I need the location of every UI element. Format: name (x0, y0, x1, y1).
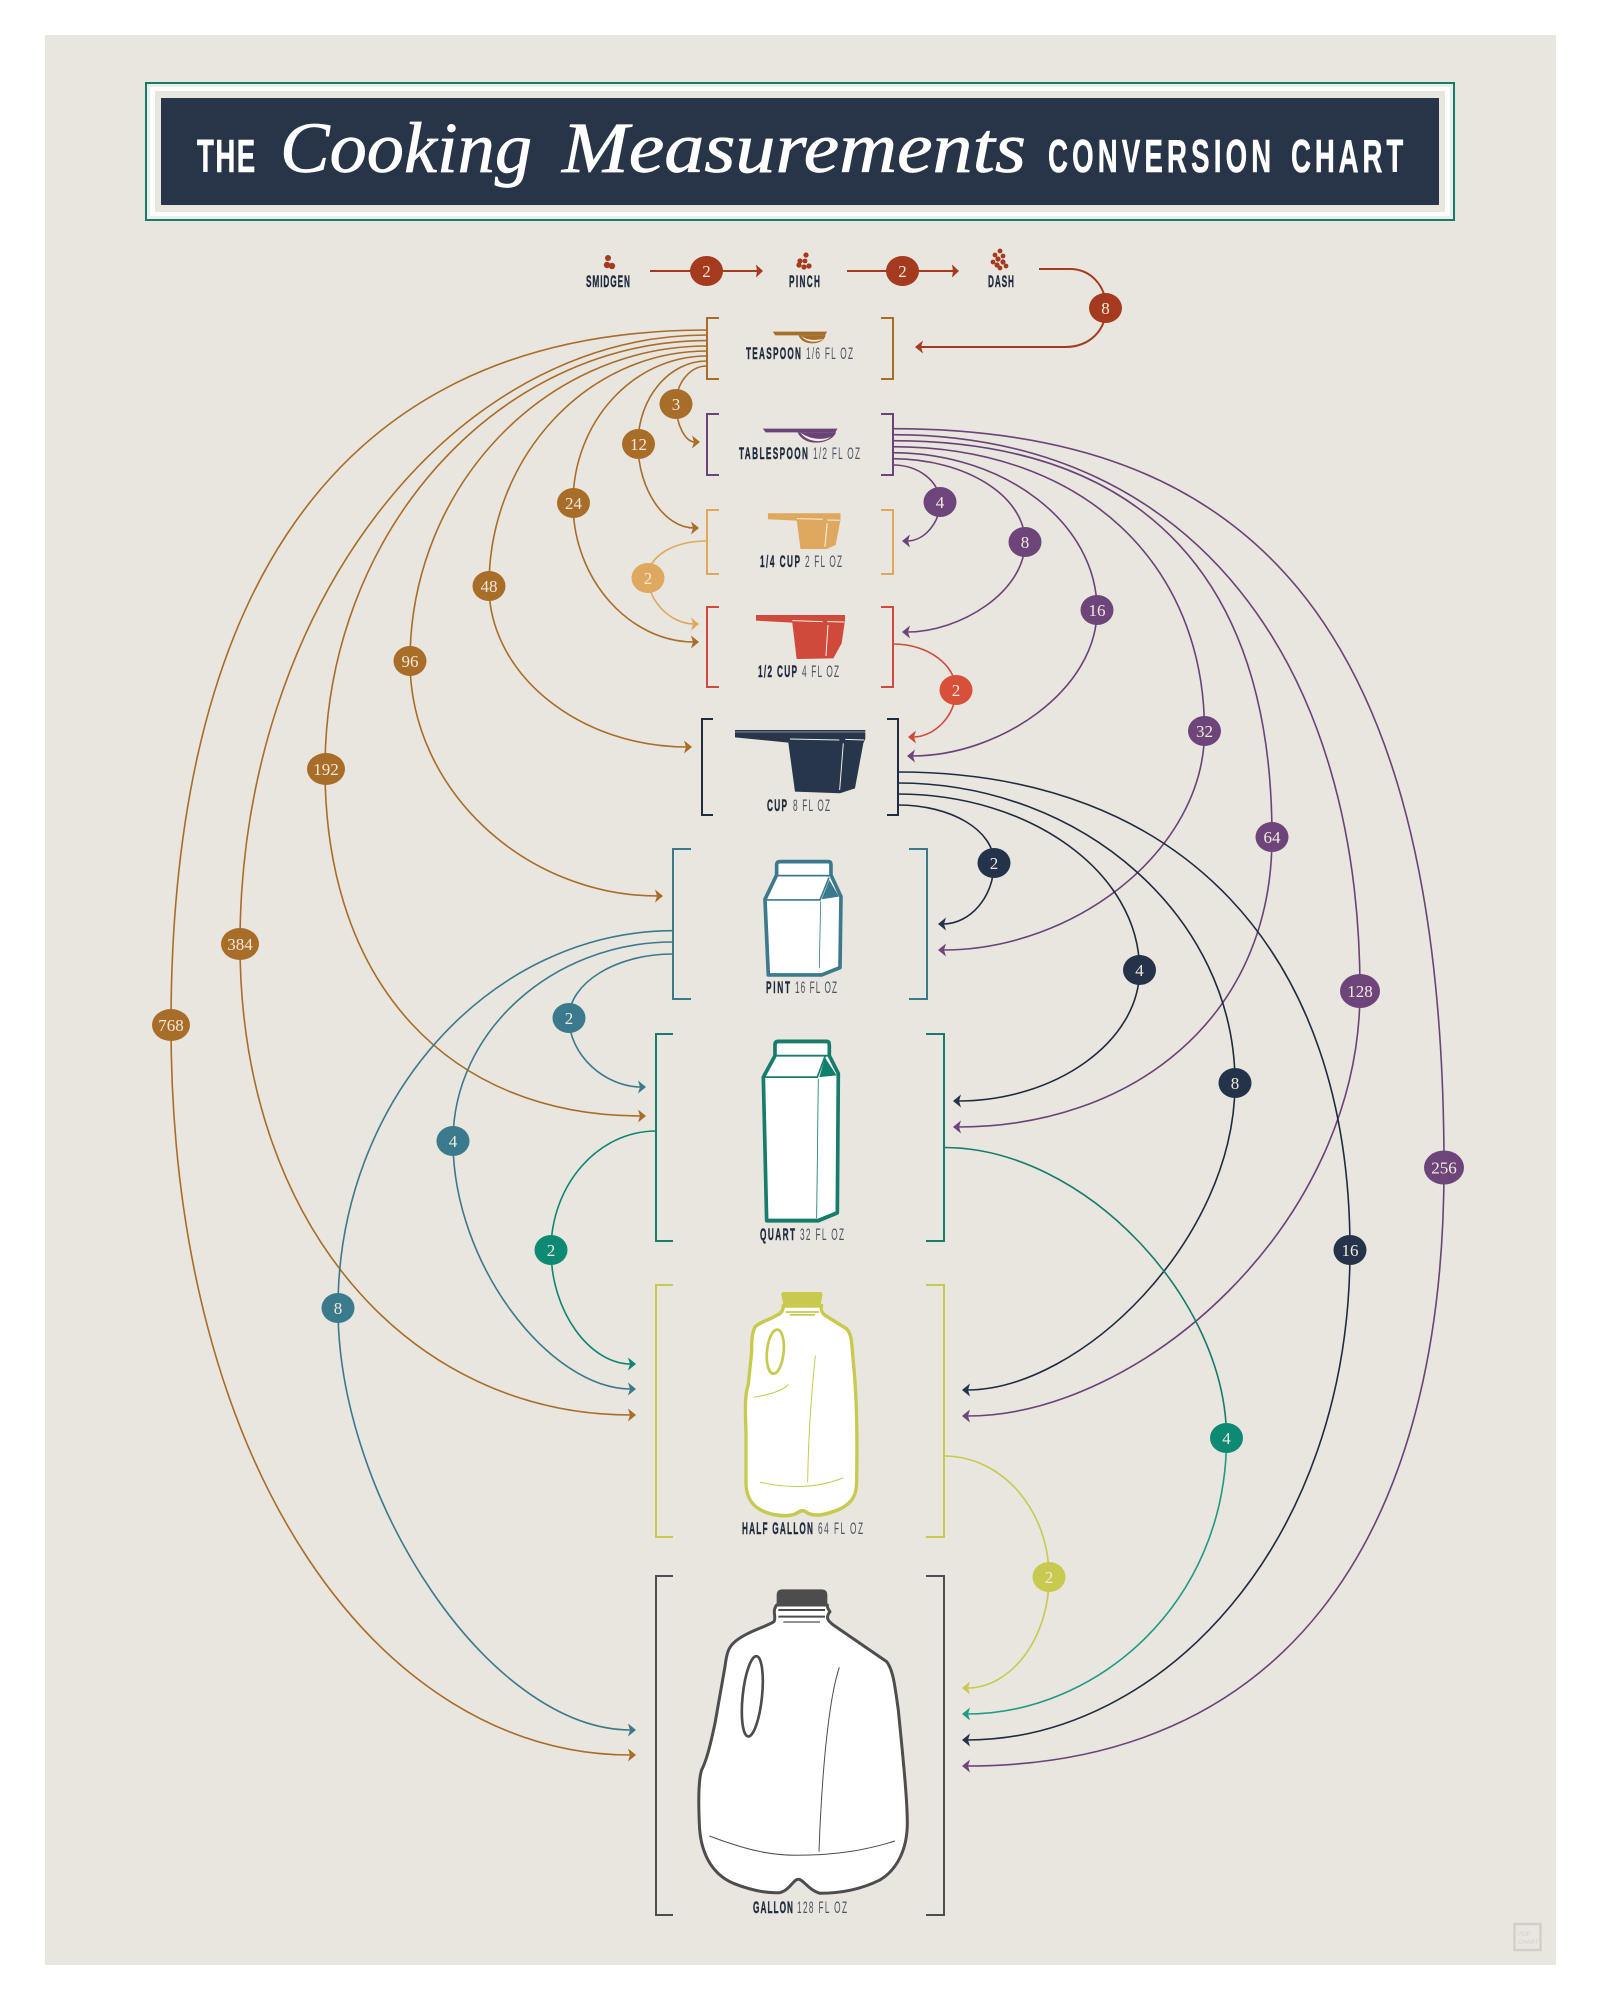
badge: 4 (436, 1126, 470, 1156)
label: half cup: 4 FL OZ (802, 662, 839, 681)
label: quarter cup (760, 552, 842, 571)
connector: 8 cups to half gallon (898, 783, 1235, 1390)
badge: 256 (1424, 1150, 1464, 1184)
badge: 8: 8 (334, 1299, 342, 1318)
connector: 8 pints to gallon (338, 931, 673, 1730)
logo: pop chart: POP (1518, 1932, 1531, 1938)
label: tablespoon: 1/2 FL OZ (813, 444, 860, 463)
badge: 8 (1008, 527, 1042, 557)
label: tablespoon: TABLESPOON (739, 444, 808, 463)
badge: 16: 16 (1342, 1241, 1358, 1260)
connector: 24 teaspoons to half cup (573, 356, 707, 642)
panel: quarter cup (707, 510, 893, 574)
badge: 96: 96 (402, 652, 418, 671)
label: pint: 16 FL OZ (795, 978, 837, 997)
badge: 768 (152, 1009, 190, 1041)
connector: 8 tablespoons to half cup (893, 459, 1025, 632)
badge: 48 (472, 571, 506, 601)
badge: 384 (221, 928, 259, 960)
icon: pinch (796, 252, 812, 270)
logo: pop chart (1514, 1924, 1540, 1950)
connector: 64 tablespoons to quart (893, 441, 1272, 1127)
icon: half cup (756, 615, 845, 659)
panel: cup (702, 719, 898, 815)
badge: 4: 4 (936, 493, 945, 512)
badge: 48: 48 (480, 577, 498, 596)
title text: cooking: Cooking (280, 108, 532, 188)
title text: the: THE (197, 132, 255, 183)
connector: 256 tablespoons to gallon (893, 429, 1444, 1766)
badge: 32 (1188, 716, 1221, 746)
badge: 64: 64 (1264, 828, 1281, 847)
badge: 3: 3 (672, 395, 680, 414)
icon: cup (735, 730, 865, 793)
label: pint (766, 978, 837, 997)
label: pinch: PINCH (789, 272, 820, 291)
connector: 2 quarts to half gallon: 2 (547, 1241, 555, 1260)
connector: 2 cups to pint (898, 805, 994, 924)
label: smidgen: SMIDGEN (586, 272, 630, 291)
badge: 128: 128 (1347, 982, 1373, 1001)
icon: smidgen (604, 255, 615, 269)
connector: 4 quarts to gallon: 4 (1222, 1429, 1231, 1448)
badge: 768: 768 (158, 1016, 184, 1035)
badge: 96 (394, 646, 426, 676)
connectors from tablespoon (893, 429, 1444, 1766)
connector: 128 tablespoons to half gallon (893, 435, 1360, 1416)
connector: 16 cups to gallon (898, 772, 1350, 1740)
badge: 192 (307, 753, 345, 785)
panel: pint (673, 849, 927, 999)
badge: 192: 192 (313, 760, 339, 779)
icon: pint carton (765, 862, 841, 975)
label: tablespoon (739, 444, 860, 463)
label: quarter cup: 2 FL OZ (805, 552, 842, 571)
badge: 8 (322, 1293, 354, 1323)
panel: quart (656, 1034, 944, 1244)
arrow: dash to teaspoon: 8 (1101, 299, 1110, 318)
badge: 8: 8 (1231, 1074, 1239, 1093)
connector: half cup to cup (893, 644, 972, 744)
arrowheads and badges: tablespoon (902, 487, 1464, 1772)
badge: 2: 2 (990, 854, 998, 873)
arrowheads and badges: pint (322, 1003, 646, 1736)
icon: teaspoon (773, 332, 827, 343)
badge: 16 (1080, 595, 1114, 625)
label: quart: QUART (760, 1225, 795, 1244)
label: gallon: 128 FL OZ (797, 1898, 847, 1917)
badge: 24 (557, 488, 590, 518)
badge: 3 (660, 389, 692, 419)
arrow: pinch to dash (847, 256, 959, 286)
connector: quarter cup to half cup (632, 541, 707, 630)
badge: 64 (1256, 822, 1288, 852)
connectors from teaspoon (171, 330, 707, 1755)
label: cup (767, 796, 830, 815)
icon: dash (991, 249, 1008, 270)
connector: 16 tablespoons to cup (893, 453, 1097, 756)
title text: measurements: Measurements (561, 108, 1026, 188)
connector: 32 tablespoons to pint (893, 447, 1204, 950)
badge: 2 (552, 1003, 586, 1033)
connector: 48 teaspoons to cup (489, 351, 707, 747)
connector: 4 quarts to gallon (944, 1148, 1243, 1720)
connectors from pint (338, 931, 673, 1730)
badge: 16: 16 (1088, 601, 1106, 620)
panel: half gallon (656, 1285, 944, 1538)
label: half gallon: 64 FL OZ (818, 1519, 863, 1538)
label: quart (760, 1225, 844, 1244)
arrow: pinch to dash: 2 (898, 262, 907, 281)
title banner (146, 83, 1454, 220)
label: cup: CUP (767, 796, 787, 815)
top row: smidgen, pinch, dash (586, 249, 1122, 354)
connectors from cup (898, 772, 1350, 1740)
badge: 4: 4 (449, 1132, 458, 1151)
connector: 96 teaspoons to pint (410, 346, 707, 896)
badge: 24: 24 (565, 494, 582, 513)
label: quart: 32 FL OZ (800, 1225, 844, 1244)
arrow: smidgen to pinch: 2 (702, 262, 711, 281)
label: half cup (758, 662, 839, 681)
connector: half cup to cup: 2 (952, 681, 960, 700)
connector: 768 teaspoons to gallon (171, 330, 707, 1755)
label: pint: PINT (766, 978, 790, 997)
badge: 2: 2 (565, 1009, 573, 1028)
panel: gallon (656, 1576, 944, 1917)
arrowheads and badges: teaspoon (152, 389, 700, 1762)
title text: chart: CHART (1291, 132, 1403, 183)
icon: gallon jug (699, 1589, 907, 1893)
badge: 256: 256 (1431, 1158, 1457, 1178)
connector: 2 half gallons to gallon (944, 1456, 1066, 1694)
connector: quarter cup to half cup: 2 (644, 569, 652, 588)
title text: conversion: CONVERSION (1048, 132, 1271, 183)
connector: 4 tablespoons to quarter cup (893, 465, 940, 541)
icon: quarter cup (768, 513, 840, 549)
connector: 4 cups to quart (898, 794, 1140, 1101)
panel: half cup (707, 607, 893, 687)
label: half gallon (742, 1519, 863, 1538)
logo: pop chart: CHART (1518, 1940, 1539, 1946)
badge: 128 (1340, 974, 1380, 1008)
panel: teaspoon (707, 318, 893, 379)
badge: 8 (1218, 1068, 1252, 1098)
label: cup: 8 FL OZ (793, 796, 830, 815)
connector: 192 teaspoons to quart (325, 341, 707, 1116)
panel: tablespoon (707, 414, 893, 475)
label: quarter cup: 1/4 CUP (760, 552, 800, 571)
badge: 4 (924, 487, 956, 517)
label: teaspoon (746, 344, 853, 363)
icon: tablespoon (763, 429, 838, 443)
label: teaspoon: TEASPOON (746, 344, 801, 363)
badge: 8: 8 (1021, 533, 1029, 552)
connector: 12 teaspoons to quarter cup (638, 361, 707, 528)
arrowheads and badges: cup (938, 848, 1366, 1746)
badge: 4 (1123, 955, 1156, 985)
badge: 384: 384 (227, 935, 253, 954)
badge: 2 (978, 848, 1010, 878)
badge: 12 (622, 429, 655, 459)
connector: 384 teaspoons to half gallon (240, 335, 707, 1415)
arrow: smidgen to pinch (650, 256, 763, 286)
connector: 3 teaspoons to tablespoon (676, 366, 707, 442)
arrow: dash to teaspoon (915, 269, 1122, 354)
connector: 2 half gallons to gallon: 2 (1045, 1568, 1053, 1587)
label: teaspoon: 1/6 FL OZ (806, 344, 853, 363)
connector: 4 pints to half gallon (453, 942, 673, 1389)
icon: quart carton (763, 1041, 838, 1221)
badge: 32: 32 (1196, 722, 1213, 741)
label: gallon: GALLON (753, 1898, 793, 1917)
label: half gallon: HALF GALLON (742, 1519, 813, 1538)
label: dash: DASH (988, 272, 1014, 291)
connector: 2 pints to quart (569, 954, 673, 1087)
icon: half gallon jug (745, 1292, 857, 1516)
label: gallon (753, 1898, 847, 1917)
label: half cup: 1/2 CUP (758, 662, 797, 681)
badge: 12: 12 (630, 435, 647, 454)
connector: 2 quarts to half gallon (534, 1131, 656, 1370)
badge: 16 (1334, 1235, 1366, 1265)
badge: 4: 4 (1135, 961, 1144, 980)
